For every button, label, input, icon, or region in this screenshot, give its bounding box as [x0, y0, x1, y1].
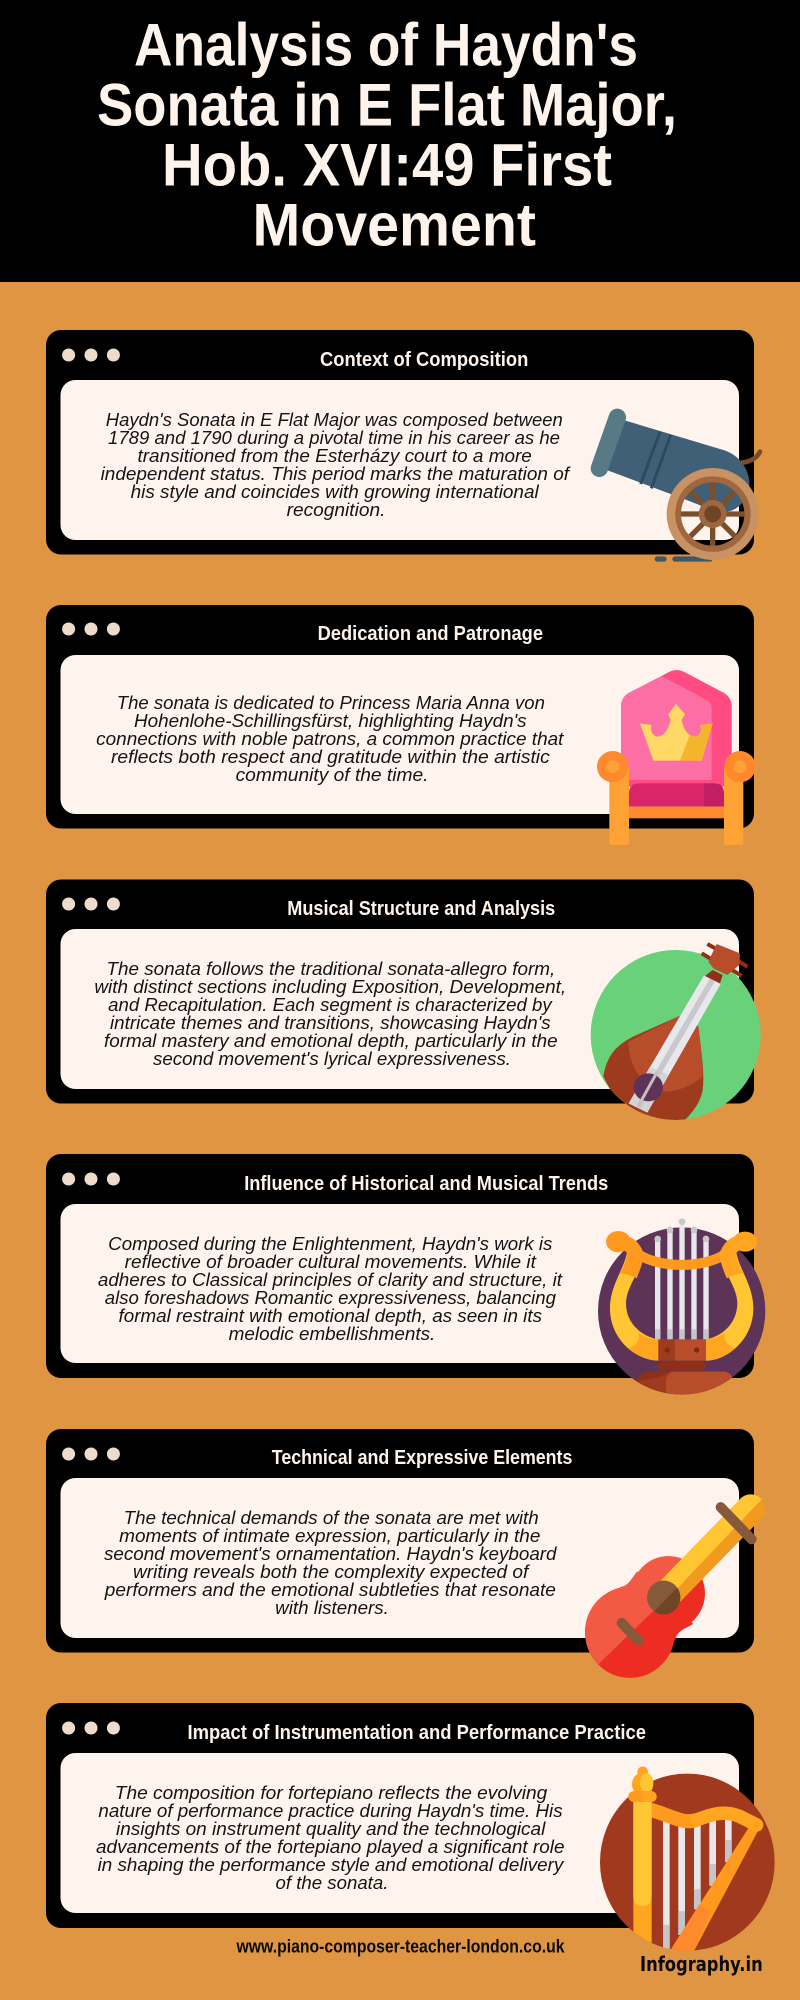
text block: context of composition: [101, 410, 571, 520]
text block: musical structure and analysis: with distinct sections including Exposition, Development,: [94, 977, 566, 997]
panel: impact of instrumentation and performance practice: [46, 1703, 775, 1953]
text block: dedication and patronage: reflects both respect and gratitude within the artistic: [111, 747, 550, 767]
panel: dedication and patronage: [46, 605, 756, 845]
text block: context of composition: recognition.: [287, 500, 385, 520]
text block: influence of historical and musical trends: formal restraint with emotional depth, as seen in its: [118, 1306, 542, 1326]
text block: context of composition: his style and coincides with growing international: [131, 482, 540, 502]
heading: influence of historical and musical trends: Influence of Historical and Musical Trends: [244, 1173, 608, 1195]
text block: musical structure and analysis: and Recapitulation. Each segment is characterized by: [108, 995, 553, 1015]
text block: technical and expressive elements: second movement's ornamentation. Haydn's keyboard: [104, 1544, 558, 1564]
text block: dedication and patronage: connections with noble patrons, a common practice that: [96, 729, 564, 749]
text block: dedication and patronage: [96, 693, 564, 785]
icon: lyre on purple circle: [598, 1218, 765, 1398]
text block: musical structure and analysis: [94, 959, 566, 1069]
icon: throne: [597, 670, 756, 845]
icon: harp on brown circle: [600, 1766, 775, 1953]
footer website link: www.piano-composer-teacher-london.co.uk: [236, 1937, 565, 1957]
icon: cannon: [599, 417, 760, 559]
heading: technical and expressive elements: Technical and Expressive Elements: [272, 1447, 572, 1469]
title banner: Hob. XVI:49 First: [162, 132, 612, 198]
text block: impact of instrumentation and performance practice: insights on instrument quality and the technological: [116, 1819, 546, 1839]
text block: influence of historical and musical trends: Composed during the Enlightenment, Haydn's work is: [108, 1234, 552, 1254]
text block: impact of instrumentation and performance practice: The composition for fortepiano reflects the evolving: [115, 1783, 547, 1803]
text block: context of composition: 1789 and 1790 during a pivotal time in his career as he: [108, 428, 560, 448]
panel: technical and expressive elements: [46, 1429, 754, 1678]
text block: impact of instrumentation and performance practice: of the sonata.: [276, 1873, 388, 1893]
text block: context of composition: independent status. This period marks the maturation of: [101, 464, 571, 484]
text block: technical and expressive elements: The technical demands of the sonata are met with: [124, 1508, 539, 1528]
text block: technical and expressive elements: moments of intimate expression, particularly in the: [119, 1526, 540, 1546]
text block: impact of instrumentation and performance practice: advancements of the fortepiano played a significant role: [96, 1837, 564, 1857]
text block: dedication and patronage: The sonata is dedicated to Princess Maria Anna von: [117, 693, 545, 713]
heading: dedication and patronage: Dedication and Patronage: [318, 623, 543, 645]
heading: musical structure and analysis: Musical Structure and Analysis: [287, 898, 555, 920]
text block: impact of instrumentation and performance practice: [96, 1783, 564, 1893]
text block: context of composition: transitioned from the Esterházy court to a more: [138, 446, 532, 466]
text block: technical and expressive elements: [104, 1508, 558, 1618]
text block: musical structure and analysis: intricate themes and transitions, showcasing Haydn's: [110, 1013, 551, 1033]
text block: impact of instrumentation and performance practice: nature of performance practice during Haydn's time. His: [98, 1801, 563, 1821]
text block: influence of historical and musical trends: [98, 1234, 563, 1344]
heading: impact of instrumentation and performance practice: Impact of Instrumentation and Performance Practice: [188, 1722, 646, 1744]
text block: technical and expressive elements: writing reveals both the complexity expected of: [133, 1562, 530, 1582]
title banner: Analysis of Haydn's: [134, 12, 638, 78]
icon: lute on green circle: [591, 944, 761, 1120]
title banner: [0, 0, 800, 282]
text block: impact of instrumentation and performance practice: in shaping the performance style and emotional delivery: [98, 1855, 564, 1875]
text block: influence of historical and musical trends: adheres to Classical principles of clarity and structure, it: [98, 1270, 563, 1290]
text block: musical structure and analysis: The sonata follows the traditional sonata-allegro form,: [106, 959, 555, 979]
panel: context of composition: [46, 330, 760, 559]
logo: Infography.in: Infography.in: [640, 1952, 763, 1976]
text block: dedication and patronage: Hohenlohe-Schillingsfürst, highlighting Haydn's: [134, 711, 527, 731]
text block: influence of historical and musical trends: also foreshadows Romantic expressiveness, balancing: [105, 1288, 556, 1308]
text block: musical structure and analysis: second movement's lyrical expressiveness.: [153, 1049, 511, 1069]
text block: dedication and patronage: community of the time.: [236, 765, 428, 785]
panel: musical structure and analysis: [46, 880, 761, 1120]
text block: technical and expressive elements: performers and the emotional subtleties that resonate: [104, 1580, 556, 1600]
icon: guitar: [585, 1507, 752, 1678]
text block: context of composition: Haydn's Sonata in E Flat Major was composed between: [106, 410, 563, 430]
title banner: Sonata in E Flat Major,: [97, 72, 677, 138]
text block: influence of historical and musical trends: melodic embellishments.: [229, 1324, 435, 1344]
title banner: Movement: [252, 192, 536, 258]
text block: technical and expressive elements: with listeners.: [275, 1598, 389, 1618]
panel: influence of historical and musical trends: [46, 1154, 765, 1398]
text block: influence of historical and musical trends: reflective of broader cultural movements. While it: [125, 1252, 537, 1272]
text block: musical structure and analysis: formal mastery and emotional depth, particularly in the: [104, 1031, 558, 1051]
heading: context of composition: Context of Composition: [320, 349, 528, 371]
